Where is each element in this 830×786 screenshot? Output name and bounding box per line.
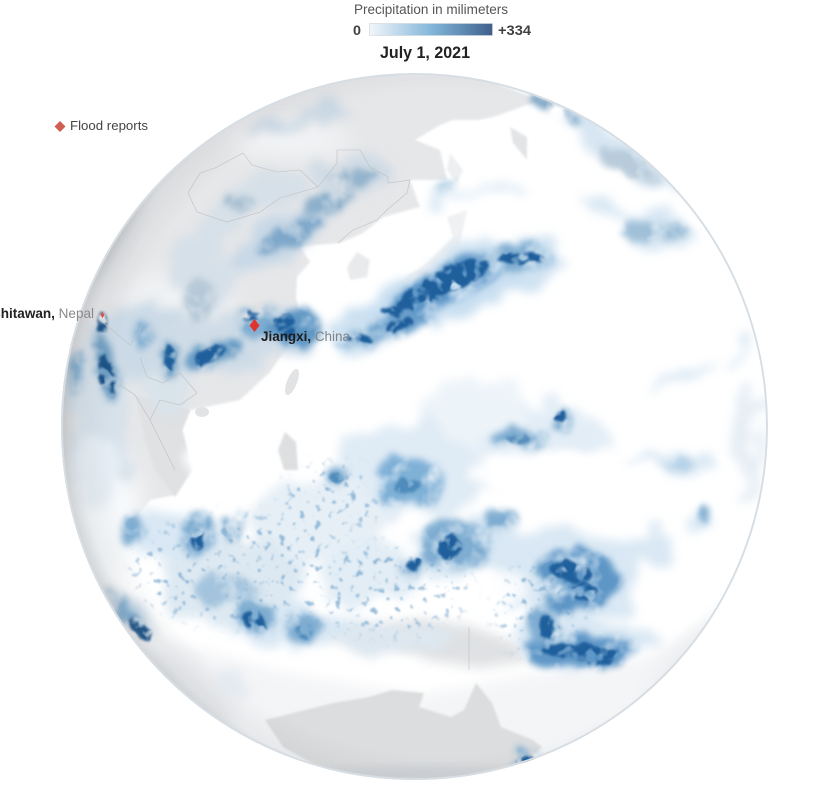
legend colour bar <box>370 24 492 36</box>
flood reports key <box>54 118 149 133</box>
precipitation: pale haze <box>72 95 762 685</box>
flood reports label: Flood reports <box>70 118 149 133</box>
marker: Jiangxi flood report <box>250 319 260 332</box>
land: Kamchatka <box>510 127 527 160</box>
land: Indochina <box>174 411 190 496</box>
country borders <box>100 150 469 670</box>
land: Asia under cloud <box>63 75 664 780</box>
globe edge shading <box>61 84 352 772</box>
precipitation: medium blue <box>64 90 713 772</box>
land: Borneo <box>210 545 265 625</box>
precipitation: dark blue <box>96 251 618 767</box>
globe rim <box>62 74 767 779</box>
cloud: southern hemisphere band <box>128 628 664 760</box>
legend: precipitation scale <box>353 2 531 38</box>
legend title: Precipitation in milimeters <box>354 2 508 17</box>
legend maximum: +334 <box>498 22 531 38</box>
date heading: July 1, 2021 <box>380 44 470 62</box>
precipitation: scattered Maritime specks <box>130 465 585 655</box>
land: Sakhalin <box>448 154 462 182</box>
land: Korea <box>347 252 370 280</box>
white clouds in the tropics <box>182 449 664 609</box>
land: Hainan <box>195 407 209 417</box>
cloud texture <box>68 129 495 780</box>
land: Taiwan <box>285 369 299 395</box>
label: Jiangxi, China: Jiangxi, China <box>261 328 350 344</box>
land: Japan <box>408 211 466 278</box>
land: Australia <box>266 684 542 772</box>
land: Philippines <box>278 432 298 470</box>
icon: flood diamond <box>54 121 66 132</box>
marker: Chitawan <box>100 312 104 318</box>
legend minimum: 0 <box>353 22 361 38</box>
land: New Guinea <box>380 620 530 668</box>
